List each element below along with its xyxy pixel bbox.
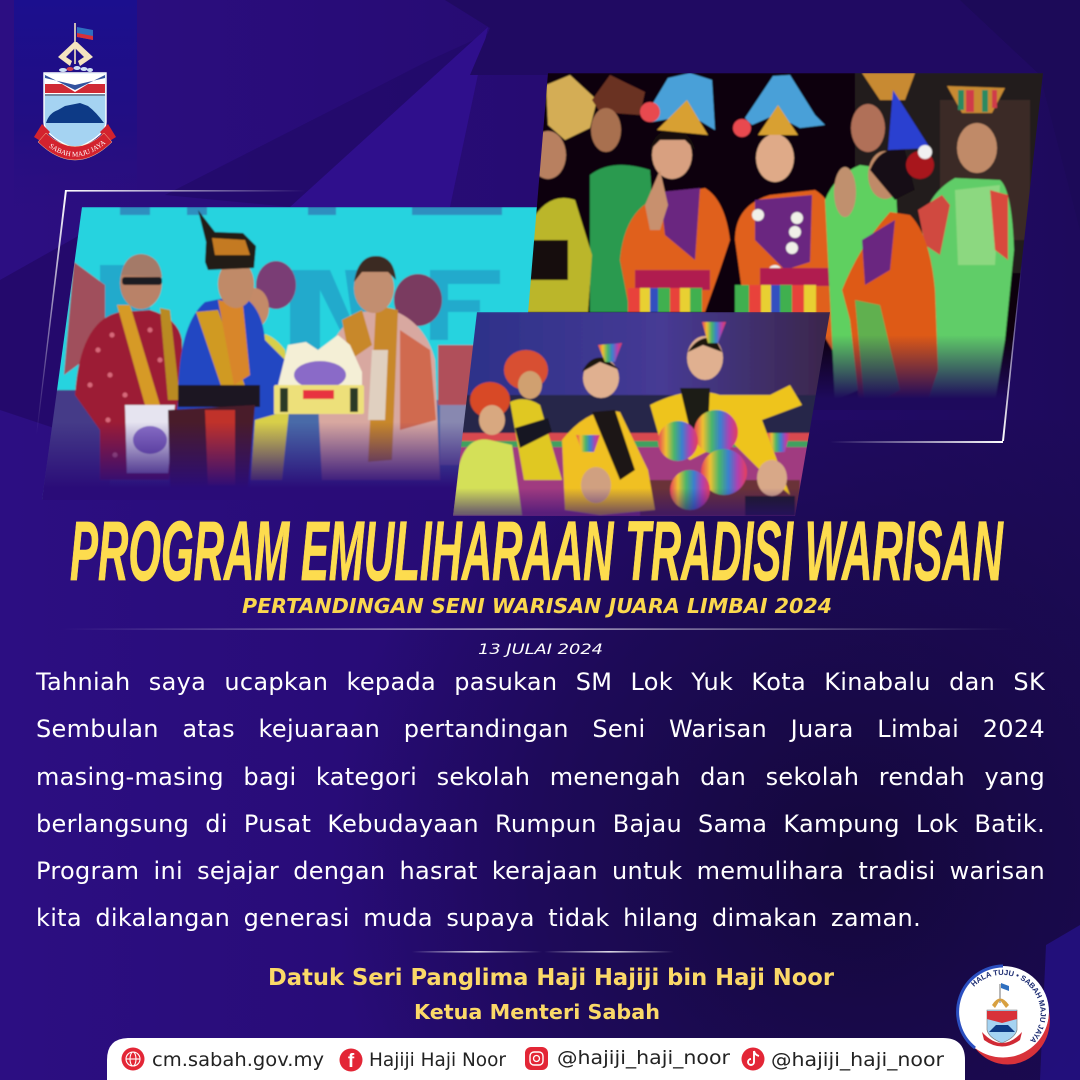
badge: Hala Tuju Sabah Maju Jaya (956, 964, 1050, 1064)
photo: dancers in orange costumes (510, 73, 1050, 413)
instagram: @hajiji_haji_noor (557, 1047, 730, 1069)
body paragraph: Program ini sejajar dengan hasrat kerajaan untuk memulihara tradisi warisan (36, 857, 1045, 885)
photo: children dancing in yellow (450, 312, 835, 517)
date: 13 JULAI 2024 (478, 642, 603, 658)
photo: award presentation (30, 207, 550, 502)
signatory name: Datuk Seri Panglima Haji Hajiji bin Haji Noor (268, 965, 835, 991)
photo frame: left (36, 190, 306, 435)
photo frame: right (830, 265, 1022, 443)
body paragraph: Sembulan atas kejuaraan pertandingan Seni Warisan Juara Limbai 2024 (36, 715, 1045, 743)
body paragraph: kita dikalangan generasi muda supaya tidak hilang dimakan zaman. (36, 904, 921, 932)
contact bar (107, 1038, 965, 1080)
facebook: f (348, 1051, 355, 1072)
subtitle: PERTANDINGAN SENI WARISAN JUARA LIMBAI 2024 (242, 594, 832, 618)
facebook: Hajiji Haji Noor (369, 1049, 506, 1071)
body paragraph: Tahniah saya ucapkan kepada pasukan SM Lok Yuk Kota Kinabalu dan SK (36, 668, 1045, 696)
website: cm.sabah.gov.my (152, 1049, 324, 1071)
body paragraph (36, 668, 1046, 932)
body paragraph: berlangsung di Pusat Kebudayaan Rumpun Bajau Sama Kampung Lok Batik. (36, 810, 1045, 838)
icon: Sabah state crest (34, 23, 116, 160)
icon: Sabah state crest: SABAH MAJU JAYA (49, 141, 106, 156)
signatory title: Ketua Menteri Sabah (414, 1000, 660, 1024)
body paragraph: masing-masing bagi kategori sekolah menengah dan sekolah rendah yang (36, 763, 1045, 791)
tiktok: @hajiji_haji_noor (771, 1049, 944, 1071)
badge: Hala Tuju Sabah Maju Jaya: HALA TUJU • SABAH MAJU JAYA (970, 970, 1046, 1042)
